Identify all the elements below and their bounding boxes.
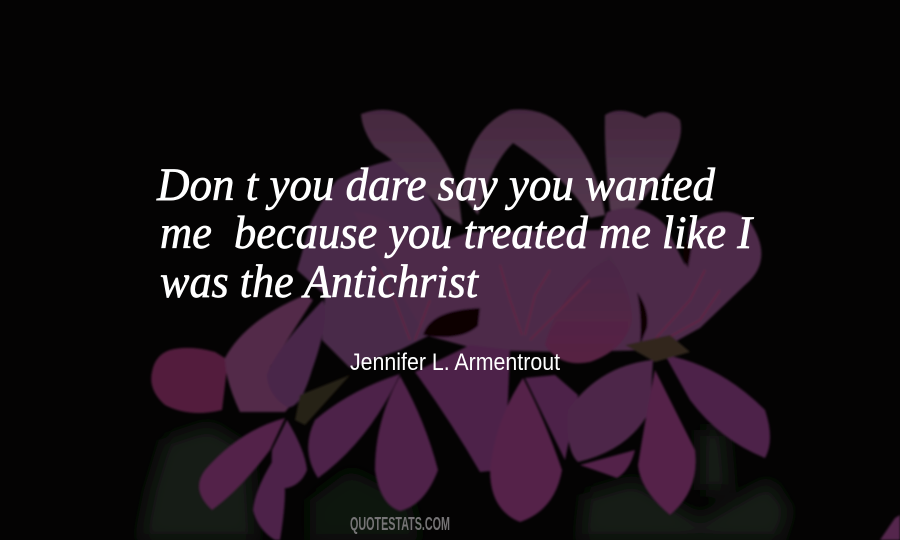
quote text xyxy=(156,159,754,308)
petal group: middle xyxy=(353,208,761,363)
quote line 3: was the Antichrist xyxy=(160,256,479,308)
petal group: bottom flowers xyxy=(308,335,900,540)
dark gaps xyxy=(423,242,692,345)
petal group: top xyxy=(297,109,681,368)
flower petals xyxy=(151,109,900,540)
red veins xyxy=(380,265,720,345)
foliage xyxy=(140,425,790,540)
petal group: left flower xyxy=(151,295,350,540)
quote line 1: Don t you dare say you wanted xyxy=(156,159,715,211)
quote line 2: me because you treated me like I xyxy=(160,207,754,259)
author: Jennifer L. Armentrout xyxy=(350,349,560,376)
watermark: QUOTESTATS.COM xyxy=(350,514,450,534)
